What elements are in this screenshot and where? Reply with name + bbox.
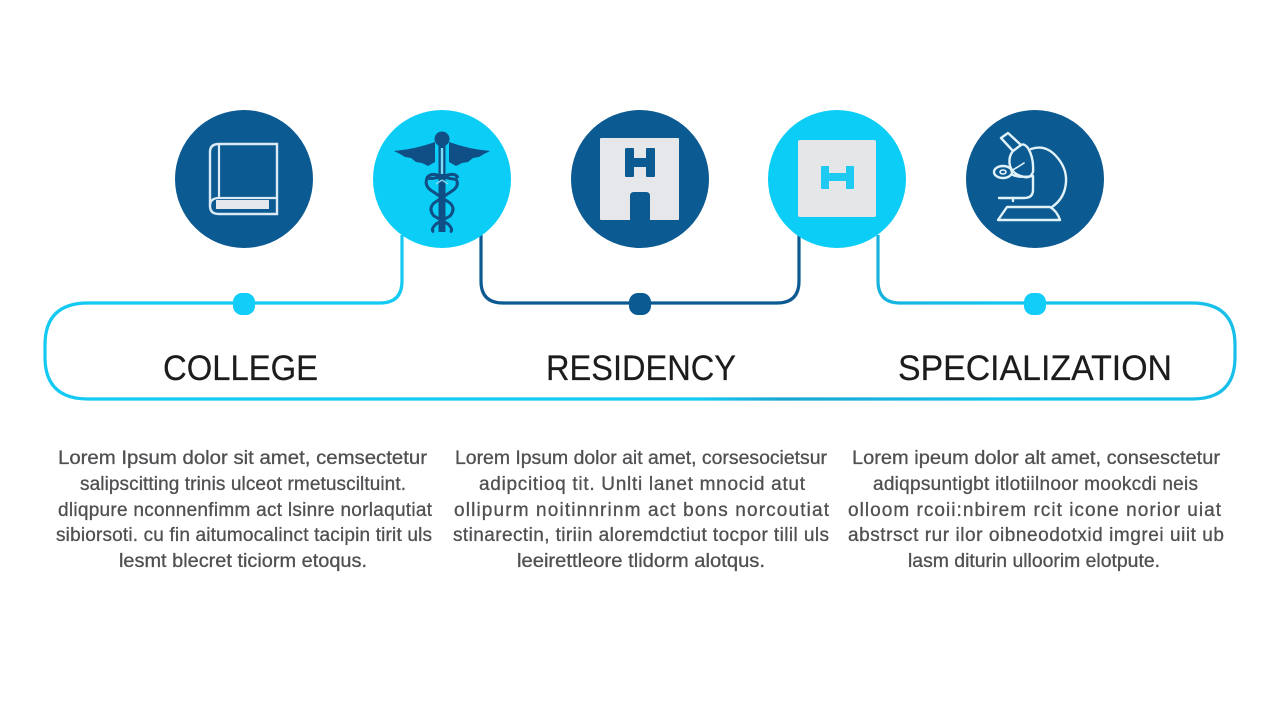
text block: residency description: adipcitioq tit. Unlti lanet mnocid atut: [479, 474, 806, 495]
icon: hospital building: [571, 110, 709, 248]
marker: specialization dot: [1024, 293, 1046, 315]
text block: college description: Lorem Ipsum dolor sit amet, cemsectetur: [58, 448, 428, 469]
text block: residency description: Lorem Ipsum dolor ait amet, corsesocietsur: [455, 448, 828, 469]
text block: college description: sibiorsoti. cu fin aitumocalinct tacipin tirit uls: [56, 525, 432, 546]
marker: college dot: [233, 293, 255, 315]
text block: college description: [56, 448, 433, 572]
icon: book: [175, 110, 313, 248]
text block: residency description: leeirettleore tlidorm alotqus.: [517, 551, 765, 572]
text block: college description: lesmt blecret ticiorm etoqus.: [119, 551, 367, 572]
heading: college: COLLEGE: [163, 349, 318, 388]
text block: specialization description: lasm diturin ulloorim elotpute.: [908, 551, 1160, 572]
heading: specialization: SPECIALIZATION: [898, 349, 1172, 388]
text block: specialization description: abstrsct rur ilor oibneodotxid imgrei uiit ub: [848, 525, 1224, 546]
icon: hospital square: [768, 110, 906, 248]
connector: outer cyan timeline loop: [45, 235, 1235, 399]
icon: microscope: [966, 110, 1104, 248]
text block: specialization description: olloom rcoii:nbirem rcit icone norior uiat: [848, 500, 1222, 521]
text block: specialization description: [848, 448, 1224, 572]
marker: residency dot: [629, 293, 651, 315]
text block: college description: salipscitting trinis ulceot rmetusciltuint.: [80, 474, 406, 495]
text block: specialization description: Lorem ipeum dolor alt amet, consesctetur: [852, 448, 1221, 469]
text block: residency description: [453, 448, 830, 572]
text block: residency description: stinarectin, tiriin aloremdctiut tocpor tilil uls: [453, 525, 829, 546]
icon: caduceus: [373, 110, 511, 248]
connector: navy residency segment: [481, 235, 799, 303]
text block: specialization description: adiqpsuntigbt itlotiilnoor mookcdi neis: [873, 474, 1198, 495]
text block: residency description: ollipurm noitinnrinm act bons norcoutiat: [454, 500, 830, 521]
text block: college description: dliqpure nconnenfimm act lsinre norlaqutiat: [58, 500, 433, 521]
heading: residency: RESIDENCY: [546, 349, 736, 388]
